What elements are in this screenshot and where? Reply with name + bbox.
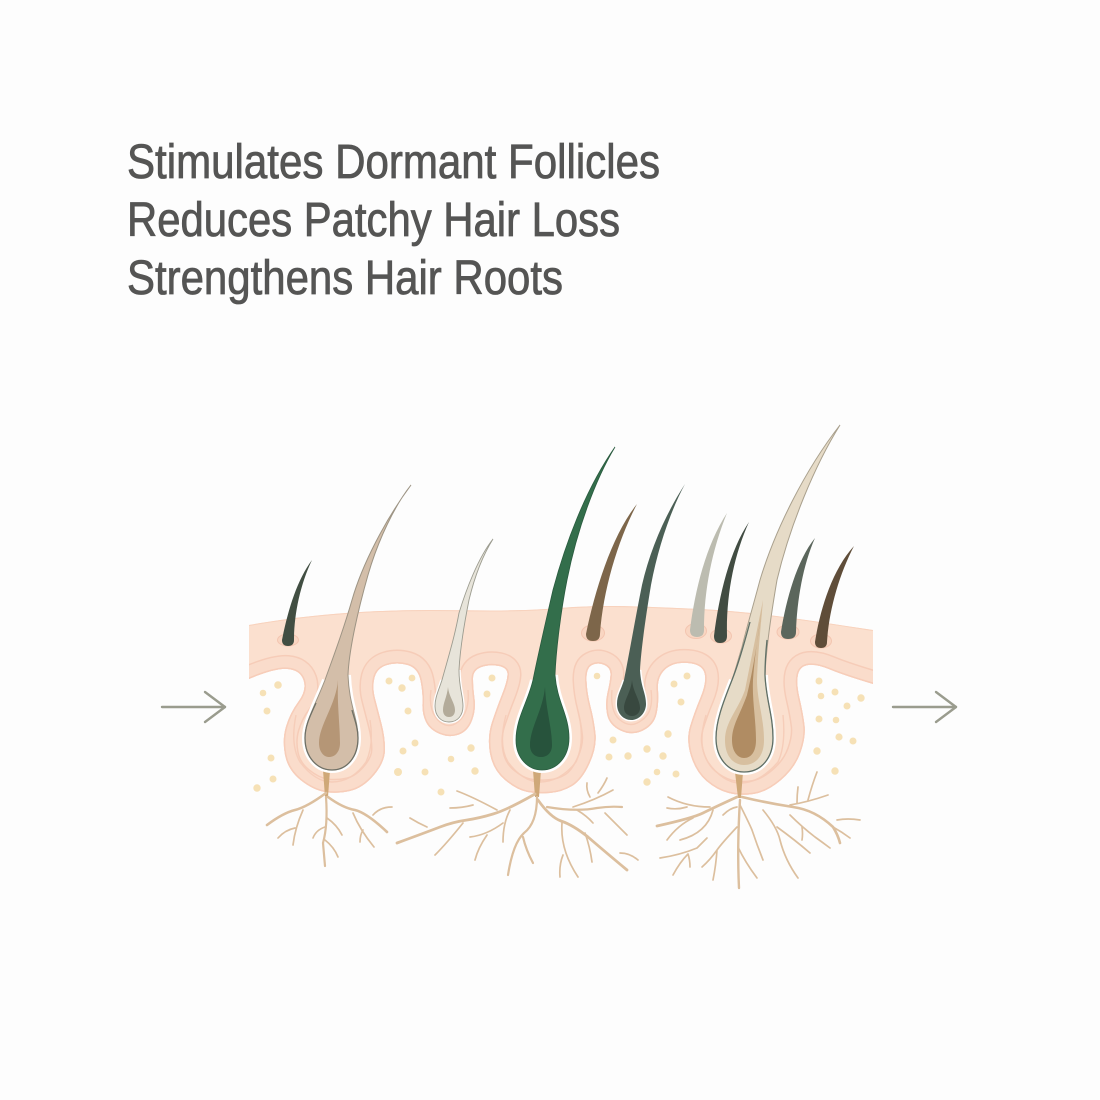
bulb halo: [305, 675, 358, 770]
green bulb halo: [516, 675, 569, 770]
shaft: [586, 504, 637, 641]
text block: benefits: [127, 136, 660, 305]
roots: middle follicle: [397, 770, 638, 877]
bulb core: [319, 680, 340, 757]
cream bulb halo: [716, 675, 773, 772]
cream bulb inner layer: [725, 600, 764, 765]
arrow: left: [162, 692, 225, 722]
pore: [686, 624, 706, 638]
arrow: right: [893, 692, 956, 722]
shaft: [282, 560, 312, 646]
pore: [582, 625, 604, 641]
pore: [710, 629, 732, 643]
follicle: large green: [516, 447, 615, 770]
green hair shaft and bulb: [516, 447, 615, 770]
hair shaft and bulb: [305, 485, 411, 770]
shaft: [815, 546, 854, 648]
small bulb core: [443, 687, 455, 717]
small hair shaft and bulb: [435, 539, 493, 722]
infographic canvas: [128, 142, 958, 890]
shaft: [714, 522, 749, 643]
cream bulb core: [732, 600, 763, 758]
follicle: large cream: [716, 425, 840, 772]
fat cell dots: [253, 672, 865, 796]
pore: [777, 625, 799, 639]
skin layer with folds: [240, 600, 880, 800]
shaft: [781, 538, 815, 639]
short hair: far left: [278, 560, 312, 646]
follicle: small dark green: [617, 484, 685, 720]
green bulb core: [530, 687, 552, 757]
cream hair shaft and bulb: [716, 425, 840, 772]
dark green bulb core: [624, 680, 640, 716]
follicle: left tan: [305, 485, 411, 770]
pore: [810, 634, 832, 648]
small bulb halo: [435, 670, 463, 722]
short hair: dark brown: [810, 546, 854, 648]
short hair: brown: [582, 504, 637, 641]
short hair: dark: [710, 522, 749, 643]
dark green hair shaft and bulb: [617, 484, 685, 720]
roots: right follicle: [657, 772, 860, 888]
shaft: [690, 513, 727, 637]
benefit line 2: Reduces Patchy Hair Loss: [127, 194, 620, 247]
dark green bulb halo: [617, 670, 646, 720]
roots: left follicle: [267, 770, 392, 866]
benefit line 1: Stimulates Dormant Follicles: [127, 136, 660, 189]
pore: [278, 634, 298, 646]
follicle: small pale: [435, 539, 493, 722]
short hair: olive grey: [777, 538, 815, 639]
benefit line 3: Strengthens Hair Roots: [127, 252, 563, 305]
short hair: grey: [686, 513, 727, 638]
